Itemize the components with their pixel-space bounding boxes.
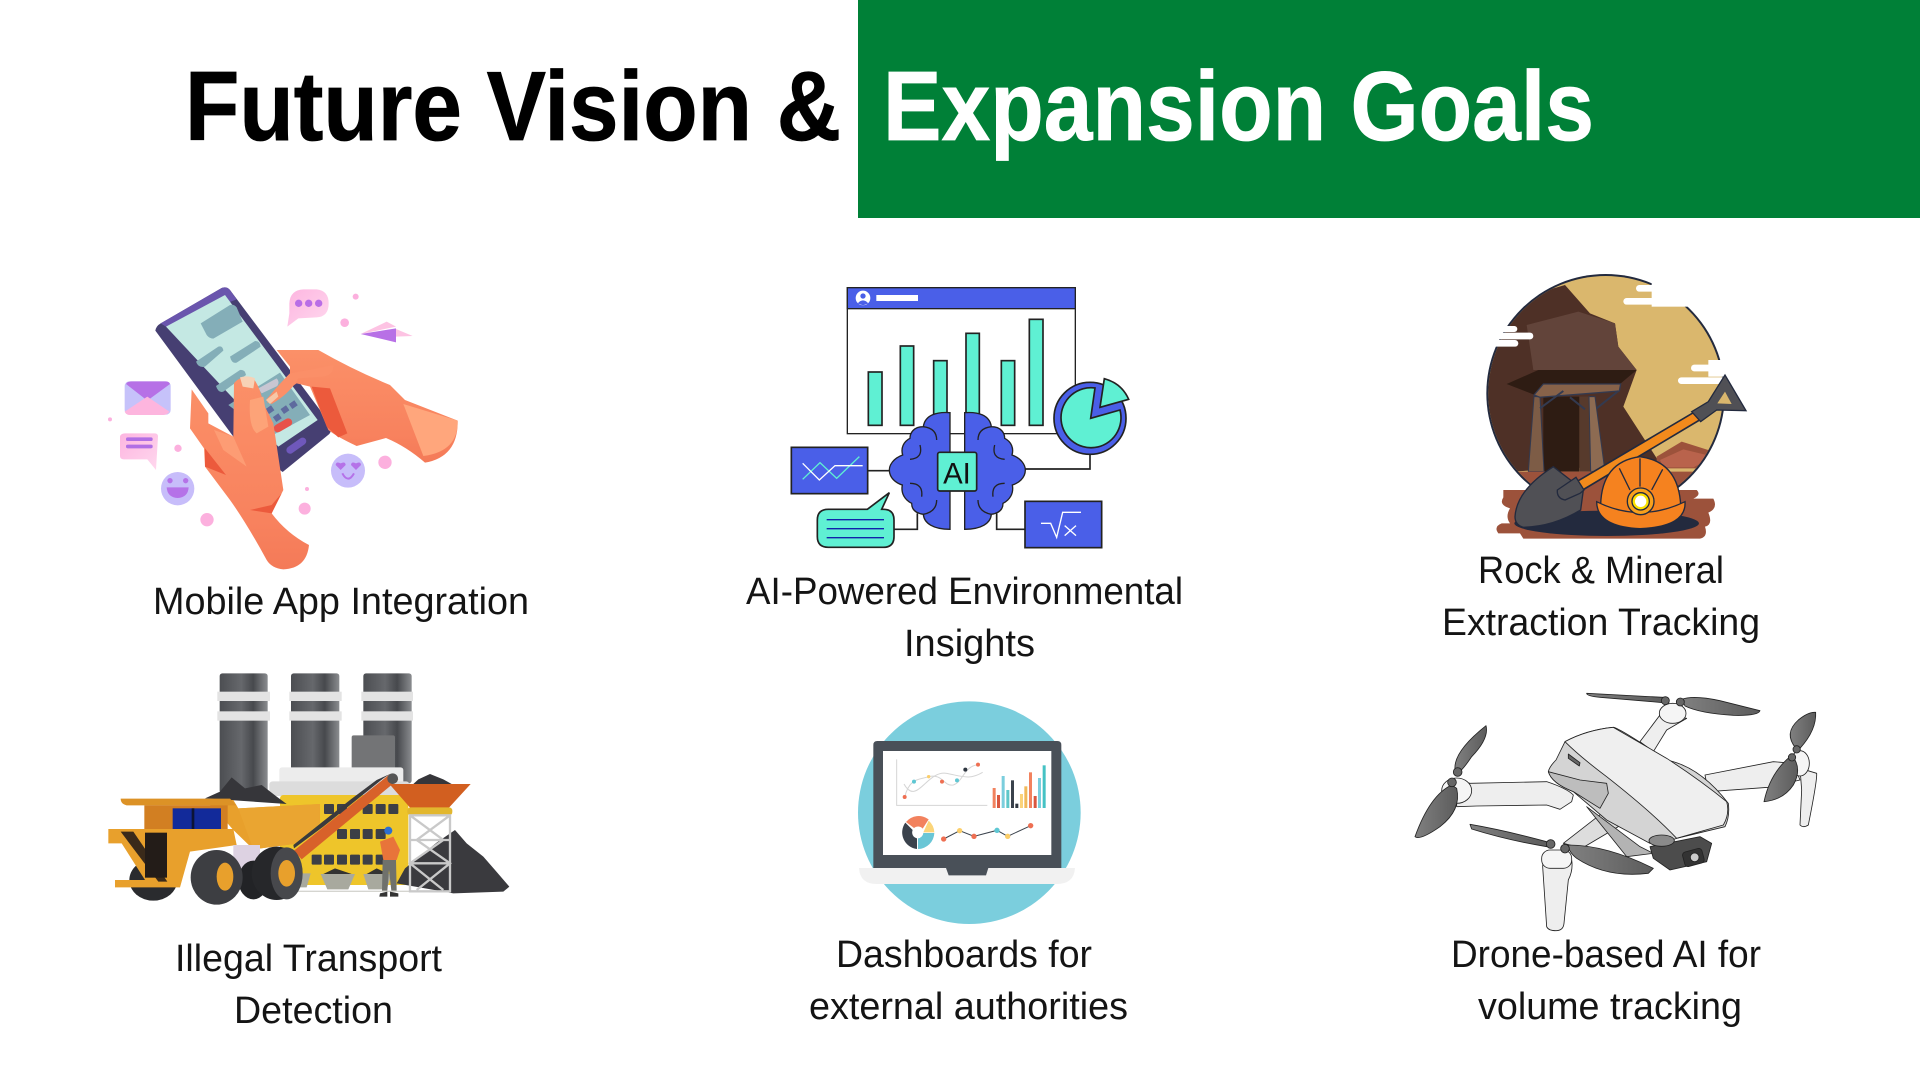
header band [858, 0, 1920, 218]
title [185, 51, 1594, 161]
pie chart [1054, 379, 1129, 454]
propellers [1415, 693, 1816, 874]
icon: mine with shovel and helmet [1480, 270, 1746, 539]
label: AI-Powered Environmental Insights: Insights [904, 623, 1035, 665]
formula card [1025, 501, 1102, 548]
label: Dashboards for external authorities: external authorities [809, 986, 1128, 1028]
left hand [190, 377, 309, 569]
connector lines [868, 455, 1090, 529]
bar chart [993, 765, 1046, 808]
label: Dashboards for external authorities [809, 934, 1128, 1028]
icon: mining truck and plant [108, 673, 509, 905]
icon: drone [1415, 693, 1817, 931]
label: Rock & Mineral Extraction Tracking: Extraction Tracking [1442, 602, 1760, 644]
icon: AI brain dashboard [791, 288, 1129, 548]
gimbal camera [1649, 835, 1712, 870]
laptop [859, 741, 1075, 884]
icon: laptop dashboards [858, 701, 1081, 924]
right hand [267, 350, 458, 463]
trend line [941, 823, 1033, 842]
label: AI-Powered Environmental Insights [746, 571, 1183, 665]
speech bubble [817, 493, 894, 547]
dump truck [108, 799, 320, 905]
label: Dashboards for external authorities: Dashboards for [836, 934, 1092, 976]
hopper and tower [389, 784, 471, 891]
shovel handle [1577, 412, 1701, 490]
ore carts [297, 868, 410, 891]
brain [889, 412, 1025, 529]
mine scene [1480, 270, 1746, 539]
label: Rock & Mineral Extraction Tracking: Rock & Mineral [1478, 550, 1724, 592]
helmet [1597, 457, 1685, 529]
label: Rock & Mineral Extraction Tracking [1442, 550, 1760, 644]
icon: hands holding phone [108, 287, 458, 569]
label: Drone-based AI for volume tracking: volume tracking [1478, 986, 1742, 1028]
browser window [847, 288, 1075, 434]
line plot [897, 759, 987, 805]
rotor hubs [1448, 697, 1800, 853]
AI chip [938, 452, 977, 491]
backdrop circle [858, 701, 1081, 924]
label: Drone-based AI for volume tracking: Drone-based AI for [1451, 934, 1761, 976]
label: Illegal Transport Detection [175, 938, 442, 1032]
label: AI-Powered Environmental Insights: AI-Powered Environmental [746, 571, 1183, 613]
messaging decorations [108, 289, 413, 526]
label: Illegal Transport Detection: Illegal Transport [175, 938, 442, 980]
line chart card [791, 447, 868, 494]
label: Illegal Transport Detection: Detection [234, 990, 393, 1032]
AI chip: AI [943, 458, 971, 491]
factory building [269, 767, 409, 885]
drone body [1548, 727, 1729, 857]
donut chart [902, 816, 934, 849]
drone arms [1442, 703, 1817, 931]
shovel blade [1515, 467, 1583, 527]
ore piles [205, 777, 287, 804]
chimneys [217, 673, 413, 793]
phone [155, 287, 332, 472]
title: Expansion Goals [883, 51, 1594, 161]
title: Future Vision & [185, 51, 841, 161]
worker [379, 827, 400, 897]
label: Mobile App Integration: Mobile App Integration [153, 581, 529, 623]
bar chart [868, 319, 1043, 425]
label: Drone-based AI for volume tracking [1451, 934, 1761, 1028]
conveyor [293, 773, 398, 859]
